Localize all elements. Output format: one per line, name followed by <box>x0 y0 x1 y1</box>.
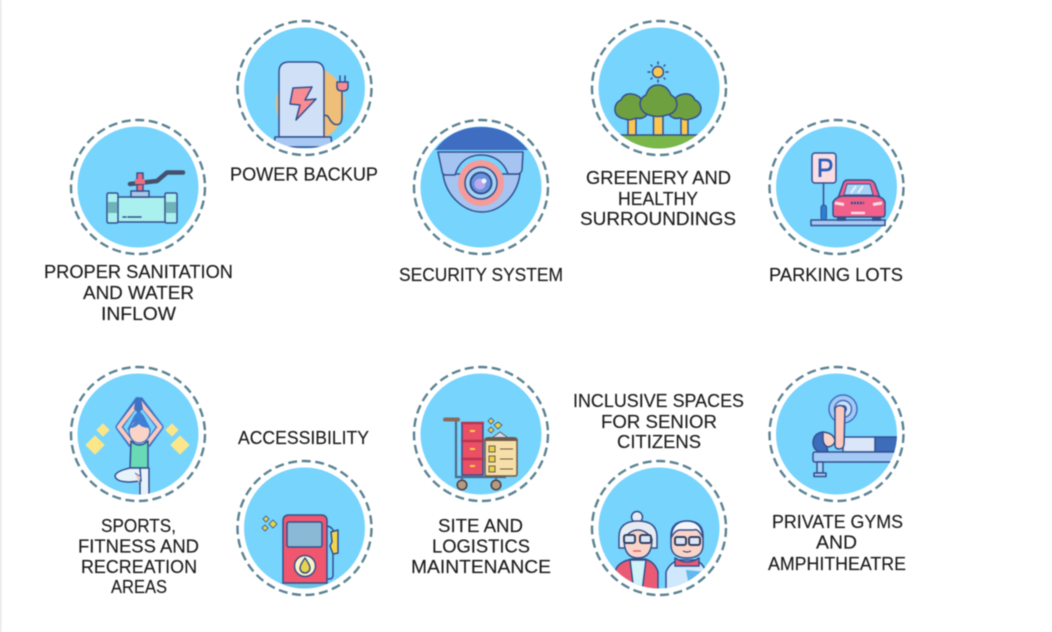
label: FOR SENIOR <box>601 412 717 432</box>
label: SPORTS, <box>101 516 176 536</box>
icon: trees and sun <box>614 60 702 150</box>
label: SURROUNDINGS <box>580 209 736 229</box>
label: PARKING LOTS <box>769 265 903 285</box>
label: INCLUSIVE SPACES <box>573 391 744 411</box>
icon: yoga figure <box>86 397 189 497</box>
label: INFLOW <box>101 304 176 324</box>
label: MAINTENANCE <box>411 557 551 577</box>
label <box>78 516 199 597</box>
label: AMPHITHEATRE <box>768 554 906 574</box>
panel: parking lots <box>769 120 904 285</box>
label: PRIVATE GYMS <box>772 512 903 532</box>
label: ACCESSIBILITY <box>238 428 369 448</box>
panel: accessibility <box>238 428 372 595</box>
label <box>580 168 736 229</box>
icon: senior couple <box>615 512 707 592</box>
label <box>768 512 906 574</box>
label: RECREATION <box>81 557 197 577</box>
label: POWER BACKUP <box>230 164 378 184</box>
panel: private gyms and amphitheatre <box>768 367 906 574</box>
label: LOGISTICS <box>432 536 530 556</box>
icon: power station <box>274 62 348 147</box>
label: SECURITY SYSTEM <box>399 265 563 285</box>
label: CITIZENS <box>617 432 701 452</box>
label: PROPER SANITATION <box>44 262 233 282</box>
panel: proper sanitation and water inflow <box>44 120 233 324</box>
label: AND <box>816 532 857 552</box>
label: AND WATER <box>83 283 194 303</box>
icon: bench press <box>813 395 903 476</box>
icon: water valve <box>107 172 183 223</box>
label <box>573 391 744 452</box>
panel: inclusive spaces for senior citizens <box>573 391 744 595</box>
panel: greenery and healthy surroundings <box>580 21 736 229</box>
label <box>44 262 233 324</box>
label: GREENERY AND <box>586 168 731 188</box>
label: AREAS <box>111 577 167 597</box>
icon: parking sign and car <box>811 153 885 226</box>
panel: power backup <box>230 21 378 184</box>
label: HEALTHY <box>618 189 698 209</box>
panel: site and logistics maintenance <box>411 367 551 577</box>
label: FITNESS AND <box>78 536 199 556</box>
label: SITE AND <box>438 516 523 536</box>
panel: security system <box>399 120 563 285</box>
label <box>411 516 551 577</box>
icon: logistics cart <box>445 418 517 490</box>
panel: sports, fitness and recreation areas <box>71 367 205 597</box>
icon: fuel pump <box>262 515 338 593</box>
icon: security camera <box>435 127 528 212</box>
